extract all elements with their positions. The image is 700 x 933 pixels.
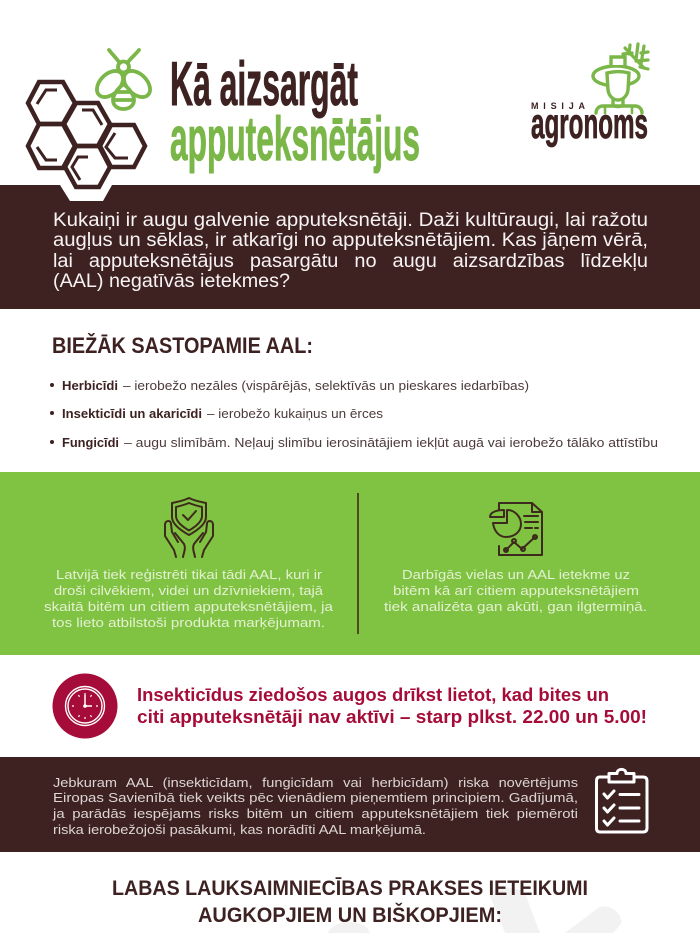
list of product types — [50, 378, 658, 450]
text: risk assessment: ja parādās iespējams risks bitēm un citiem apputeksnētājiem tiek piemēroti — [52, 806, 578, 821]
intro text: (AAL) negatīvās ietekmes? — [53, 271, 290, 292]
background silhouette shapes — [328, 888, 621, 933]
intro text: lai apputeksnētājus pasargātu no augu aizsardzības līdzekļu — [53, 251, 648, 272]
text: active substances: Darbīgās vielas un AAL ietekme uz — [402, 567, 630, 582]
title line 2: apputeksnētājus — [170, 105, 420, 174]
text: registration: droši cilvēkiem, videi un dzīvniekiem, tajā — [54, 583, 324, 598]
text: risk assessment: Eiropas Savienībā tiek veikts pēc vienādiem pieņemtiem principiem. Gadījumā, — [53, 790, 578, 805]
text: active substances: bitēm kā arī citiem apputeksnētājiem — [393, 583, 639, 598]
intro band background — [0, 185, 700, 309]
callout: safe application time: Insekticīdus ziedošos augos drīkst lietot, kad bites un — [137, 685, 609, 705]
title line 1: Kā aizsargāt — [170, 50, 358, 119]
list item: fungicides: Fungicīdi — [62, 435, 119, 450]
text: registration: skaitā bitēm un citiem apputeksnētājiem, ja — [44, 599, 334, 614]
text: registration: tos lieto atbilstoši produkta marķējumam. — [52, 615, 325, 630]
icon: honeycomb — [28, 82, 145, 201]
green panel — [0, 472, 700, 655]
title — [170, 50, 420, 174]
intro text — [53, 210, 648, 292]
risk assessment band background — [0, 757, 700, 852]
heading: good practice recommendations: AUGKOPJIEM UN BIŠKOPJIEM: — [198, 903, 502, 927]
text: active substances: tiek analizēta gan akūti, gan ilgtermiņā. — [384, 599, 647, 614]
divider — [357, 493, 359, 634]
heading: good practice recommendations: LABAS LAUKSAIMNIECĪBAS PRAKSES IETEIKUMI — [112, 877, 588, 900]
callout: safe application time: citi apputeksnētāji nav aktīvi – starp plkst. 22.00 un 5.00! — [137, 707, 647, 727]
list item: fungicides: – augu slimībām. Neļauj slimību ierosinātājiem iekļūt augā vai ierobežo tālāko attīstību — [124, 435, 658, 450]
icon: clock — [52, 674, 118, 738]
intro text: augļus un sēklas, ir atkarīgi no apputeksnētājiem. Kas jāņem vērā, — [53, 230, 648, 251]
icon: report document — [490, 503, 542, 555]
text: active substances — [384, 567, 647, 614]
text: risk assessment — [52, 775, 579, 837]
list item: herbicides: Herbicīdi — [62, 378, 118, 393]
text: registration: Latvijā tiek reģistrēti tikai tādi AAL, kuri ir — [56, 567, 323, 582]
logo figure — [593, 44, 648, 113]
list item: insecticides — [50, 406, 384, 421]
icon: checklist — [596, 769, 647, 832]
text: risk assessment: Jebkuram AAL (insekticīdam, fungicīdam vai herbicīdam) riska novērtējums — [53, 775, 579, 790]
logo: Misija Agronoms — [531, 44, 648, 148]
icon: shield in hands — [165, 498, 213, 557]
text: risk assessment: riska ierobežojoši pasākumi, kas norādīti AAL marķējumā. — [53, 822, 426, 837]
list item: insecticides: – ierobežo kukaiņus un ērces — [207, 406, 384, 421]
heading: good practice recommendations — [112, 877, 588, 927]
logo text: misija: MISIJA — [531, 101, 586, 111]
icon: bee — [92, 50, 155, 109]
list item: herbicides: – ierobežo nezāles (vispārējās, selektīvās un pieskares iedarbības) — [123, 378, 529, 393]
text: registration — [44, 567, 334, 630]
heading: common products: BIEŽĀK SASTOPAMIE AAL: — [52, 333, 313, 358]
intro text: Kukaiņi ir augu galvenie apputeksnētāji. Daži kultūraugi, lai ražotu — [53, 210, 648, 231]
callout: safe application time — [137, 685, 647, 727]
list item: insecticides: Insekticīdi un akaricīdi — [62, 406, 202, 421]
